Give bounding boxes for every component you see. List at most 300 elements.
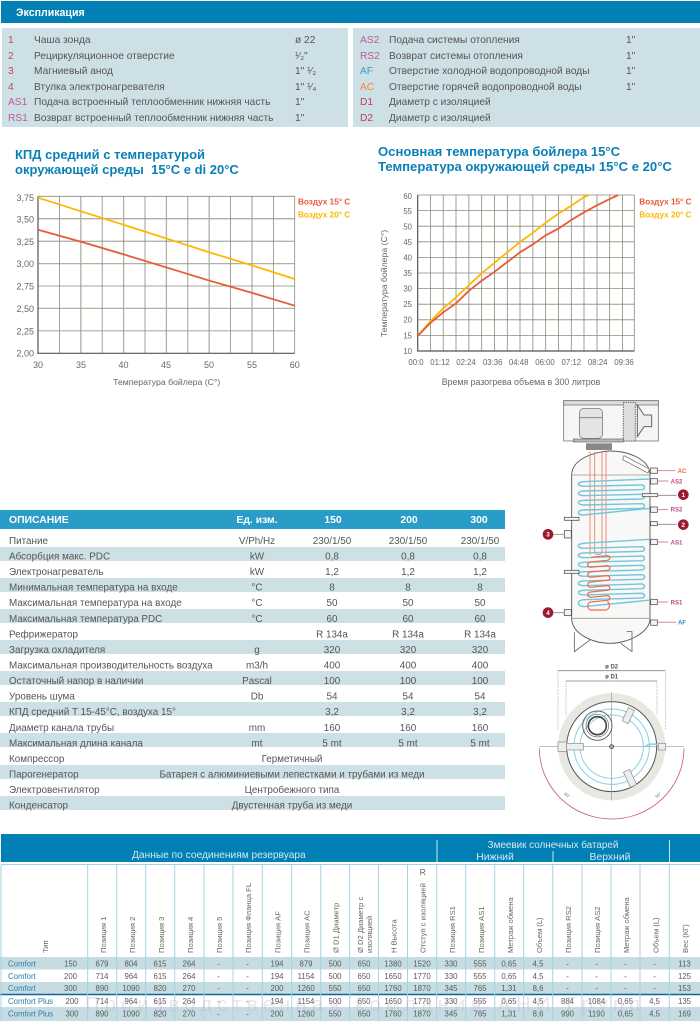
red coil — [588, 556, 610, 610]
line chart: efficiency: Температура бойлера (C°) — [113, 377, 220, 387]
row: Comfort Plus 300: 270 — [182, 1010, 196, 1018]
row: Comfort Plus 300: 200 — [270, 1010, 284, 1018]
row: Comfort Plus 200: 0,65 — [501, 997, 517, 1006]
line chart: heating time: 02:24 — [456, 358, 476, 367]
line chart: efficiency: 30 — [33, 360, 43, 370]
table: description: mm — [249, 723, 265, 734]
table: description: °C — [251, 582, 263, 594]
rotated column headers: Метраж обмена — [622, 896, 631, 953]
table: description: 8 — [329, 582, 335, 594]
row: Comfort 200: 1154 — [298, 972, 315, 981]
row: Comfort 150: 4,5 — [533, 960, 544, 968]
row bands — [0, 957, 700, 1021]
panel: explication left: 2 — [8, 51, 14, 62]
line chart: efficiency: 60 — [290, 360, 300, 370]
table: description: Db — [251, 692, 264, 702]
fittings — [564, 468, 658, 625]
rotated column headers: Позиция Фланца FL — [244, 883, 253, 953]
row: Comfort Plus 200: 1154 — [298, 997, 315, 1006]
row: Comfort Plus 200: - — [217, 997, 220, 1006]
rotated column headers: Позиция AC — [302, 910, 312, 953]
connection labels: AS2 — [671, 479, 683, 485]
row: Comfort 150: 330 — [444, 960, 458, 968]
line chart: heating time: 03:36 — [483, 358, 502, 367]
table: description: m3/h — [246, 660, 268, 672]
table: description: 60 — [475, 614, 486, 625]
line chart: efficiency: 3,50 — [16, 214, 34, 224]
table header band: Верхний — [590, 852, 631, 863]
heat pump unit — [564, 401, 658, 450]
row: Comfort Plus 300: 345 — [444, 1010, 458, 1018]
table header: Ед. изм. — [236, 515, 278, 526]
table: description: 0,8 — [473, 552, 487, 562]
table: description: Абсорбция макс. PDC — [9, 552, 110, 562]
panel: explication right: Отверстие горячей водопроводной воды — [389, 82, 582, 93]
table: description: 5 mt — [470, 738, 490, 750]
panel: explication left: 3 — [8, 66, 14, 77]
rotated column headers: Позиция AS2 — [593, 906, 602, 953]
row: Comfort Plus 200: 1770 — [413, 997, 431, 1006]
table: description: КПД средний T 15-45°C, воздуха 15° — [9, 707, 176, 718]
table: description: 54 — [403, 692, 414, 702]
diagram: tank cross-section — [543, 401, 689, 652]
row: Comfort 200: 125 — [678, 972, 692, 981]
line chart: heating time: 15 — [403, 332, 413, 340]
row: Comfort 300: 765 — [473, 984, 487, 993]
legend: efficiency chart: Воздух 20° C — [298, 210, 350, 220]
panel: explication right: AC — [360, 82, 374, 93]
panel: explication left: ¹⁄₂" — [295, 51, 308, 62]
row: Comfort 150: 113 — [678, 960, 691, 968]
legend: heating chart: Воздух 15° C — [639, 198, 692, 207]
line chart: heating time: 55 — [403, 207, 413, 216]
line chart: heating time: 07:12 — [562, 358, 581, 367]
anode — [623, 456, 649, 473]
row: Comfort Plus 200: 135 — [678, 997, 692, 1006]
panel: explication left: Подача встроенный теплообменник нижняя часть — [34, 96, 270, 108]
rotated column headers: Позиция RS2 — [564, 906, 573, 953]
panel: explication right: 1" — [626, 35, 636, 46]
line chart: efficiency: 3,25 — [16, 237, 34, 247]
table: description: 0,8 — [325, 552, 339, 562]
row: Comfort 200: 615 — [153, 972, 167, 981]
heading: heating chart: Основная температура бойлера 15°C — [378, 144, 621, 159]
panel: explication right: Отверстие холодной водопроводной воды — [389, 66, 590, 77]
table: description: 160 — [400, 723, 417, 734]
rotated column headers: Позиция 3 — [157, 917, 166, 953]
row: Comfort Plus 200: 200 — [65, 997, 79, 1006]
curve: air 15 — [38, 230, 295, 306]
line chart: heating time: 60 — [403, 192, 413, 201]
line chart: efficiency: 35 — [76, 360, 86, 370]
table: description — [0, 510, 505, 812]
line chart: efficiency: 2,75 — [16, 282, 34, 292]
table: description: 1,2 — [325, 567, 339, 578]
table: description: g — [254, 645, 260, 656]
row: Comfort Plus 200: 4,5 — [649, 997, 661, 1006]
panel: explication left: Чаша зонда — [34, 35, 91, 46]
rotated column headers: Позиция 4 — [186, 917, 195, 953]
table: description: 50 — [327, 598, 338, 609]
panel: explication right: D1 — [360, 97, 373, 108]
upper coil — [578, 479, 650, 515]
table: description: Pascal — [242, 676, 272, 687]
row: Comfort Plus 300: 765 — [473, 1010, 487, 1018]
numbered markers: 2 — [682, 522, 686, 529]
table header: 150 — [324, 515, 342, 526]
legs — [574, 632, 632, 652]
legend: heating chart: Воздух 20° C — [639, 210, 692, 220]
row: Comfort 150: 500 — [328, 960, 342, 968]
row: Comfort 300: 820 — [153, 984, 167, 993]
row: Comfort 300: 8,6 — [533, 984, 543, 993]
row: Comfort Plus 200: 330 — [444, 997, 458, 1006]
row: Comfort Plus 200: 964 — [124, 997, 138, 1006]
flange — [583, 711, 612, 740]
heading: heating chart: Температура окружающей среды 15°C e 20°C — [378, 159, 672, 174]
table: description: Максимальная температура PDC — [9, 614, 162, 625]
table: description: 160 — [324, 723, 341, 734]
connection labels: AS1 — [671, 541, 683, 547]
panel: explication right: AF — [360, 66, 373, 77]
row: Comfort 200: Comfort — [8, 972, 37, 981]
rotated column headers: Ø D1 Диаметр — [332, 903, 340, 953]
line chart: heating time: Время разогрева объема в 300 литров — [442, 377, 601, 387]
row: Comfort Plus 200: 555 — [473, 997, 487, 1006]
stubs — [558, 708, 666, 787]
row: Comfort 200: 264 — [182, 972, 196, 981]
row: Comfort 200: 555 — [473, 972, 487, 981]
line chart: heating time: 00:0 — [408, 358, 424, 367]
table: description: Конденсатор — [9, 800, 69, 812]
rotated column headers: Позиция 5 — [215, 917, 224, 953]
numbered markers: 3 — [546, 532, 550, 539]
row: Comfort 200: 0,65 — [501, 972, 517, 981]
table: description: 1,2 — [401, 567, 415, 578]
table header band: Данные по соединениям резервуара — [132, 850, 306, 861]
row: Comfort Plus 300 — [8, 1010, 691, 1018]
row: Comfort Plus 300: 0,65 — [618, 1010, 634, 1018]
row: Comfort Plus 300: 990 — [561, 1010, 575, 1018]
line chart: heating time: 30 — [403, 284, 413, 294]
row: Comfort 200: 330 — [444, 972, 458, 981]
row: Comfort Plus 200: 194 — [270, 997, 284, 1006]
table: description: Минимальная температура на входе — [9, 582, 178, 594]
panel: explication right: Диаметр с изоляцией — [389, 113, 491, 124]
line chart: heating time: 25 — [403, 300, 413, 309]
row: Comfort 300: - — [566, 984, 569, 993]
line chart: heating time: 09:36 — [614, 358, 634, 367]
table: description: 100 — [472, 676, 489, 687]
table: description: 230/1/50 — [389, 536, 428, 547]
table: description: 5 mt — [322, 738, 342, 750]
dimension lines — [558, 671, 665, 730]
row: Comfort 150: - — [217, 960, 220, 968]
row: Comfort Plus 300: 4,5 — [649, 1010, 661, 1018]
table: description: 3,2 — [401, 707, 415, 718]
line chart: heating time: 01:12 — [430, 358, 450, 367]
table: description: Компрессор — [9, 754, 65, 765]
row: Comfort 300: 1260 — [297, 984, 315, 993]
panel: explication left — [2, 28, 348, 127]
table: description: Максимальная производительность воздуха — [9, 660, 213, 672]
row: Comfort 200: 500 — [328, 972, 342, 981]
rotated column headers: R — [420, 867, 426, 877]
row: Comfort 300: 200 — [270, 984, 284, 993]
panel: explication left: RS1 — [8, 113, 28, 124]
row: Comfort 200: 200 — [64, 972, 78, 981]
table: description: Уровень шума — [9, 692, 75, 702]
table: description: Диаметр канала трубы — [9, 723, 114, 734]
table header band — [1, 834, 700, 863]
table: description: 1,2 — [473, 567, 487, 578]
panel: explication left: Рециркуляционное отверстие — [34, 51, 175, 62]
table header: 200 — [400, 515, 418, 526]
row: Comfort Plus 300: 1760 — [384, 1010, 402, 1018]
row: Comfort Plus 300: 820 — [153, 1010, 167, 1018]
table: description: 100 — [400, 676, 417, 687]
row: Comfort Plus 200: 1084 — [588, 997, 606, 1006]
row: Comfort 150: 804 — [124, 960, 138, 968]
row: Comfort 300: 345 — [444, 984, 458, 993]
table: description: Питание — [9, 536, 48, 547]
panel: explication right: D2 — [360, 113, 373, 124]
row: Comfort Plus 300: 8,6 — [533, 1010, 543, 1018]
row: Comfort Plus 200: 1650 — [384, 997, 402, 1006]
connection labels: RS1 — [671, 600, 683, 606]
row: Comfort 300: Comfort — [8, 984, 37, 993]
row: Comfort 150: - — [246, 960, 249, 968]
panel: explication left: ø 22 — [295, 35, 316, 46]
row: Comfort Plus 300: Comfort Plus — [8, 1010, 53, 1018]
line chart: efficiency: 40 — [118, 360, 129, 370]
line chart: efficiency — [16, 193, 300, 387]
row: Comfort 200: - — [246, 972, 249, 981]
table: description: Электровентилятор — [9, 785, 100, 796]
row: Comfort Plus 200: 714 — [95, 997, 109, 1006]
table: description: Максимальная температура на входе — [9, 598, 182, 609]
row: Comfort Plus 200: Comfort Plus — [8, 997, 53, 1006]
line chart: efficiency: 2,25 — [16, 326, 34, 336]
row: Comfort 300 — [8, 984, 691, 993]
table: description: Двустенная труба из меди — [232, 800, 352, 812]
table: description: 3,2 — [473, 707, 487, 718]
table: description: 3,2 — [325, 707, 339, 718]
rotated column headers — [41, 867, 690, 953]
line chart: heating time: 35 — [403, 269, 413, 278]
line chart: efficiency: 45 — [161, 360, 171, 370]
table: description: R 134a — [316, 630, 348, 640]
row: Comfort Plus 200: - — [246, 997, 249, 1006]
row: Comfort 150: 1520 — [413, 960, 431, 968]
numbered markers: 1 — [682, 492, 686, 499]
row: Comfort 300: 1870 — [413, 984, 431, 993]
row: Comfort Plus 200: 884 — [561, 997, 575, 1006]
explication header: Экспликация — [16, 7, 85, 19]
table: description: kW — [250, 552, 265, 562]
table: description: V/Ph/Hz — [239, 536, 275, 547]
row: Comfort 150: - — [566, 960, 569, 968]
numbered markers — [543, 489, 689, 618]
row: Comfort 300: - — [595, 984, 598, 993]
diagram: top view: 90° — [563, 791, 571, 799]
row: Comfort 150: - — [595, 960, 598, 968]
row: Comfort 200: 1650 — [384, 972, 402, 981]
line chart: heating time: 04:48 — [509, 358, 528, 367]
row: Comfort 150 — [8, 960, 691, 968]
row: Comfort 300: - — [653, 984, 656, 993]
diagram: top view: ø D1 — [605, 675, 619, 681]
row: Comfort Plus 300: 1870 — [413, 1010, 431, 1018]
row: Comfort Plus 200: 4,5 — [533, 997, 544, 1006]
watermark: Производственная компания АНИ Групп — [85, 994, 640, 1016]
panel: explication right: Возврат системы отопления — [389, 51, 523, 62]
row: Comfort Plus 200: 264 — [182, 997, 196, 1006]
row: Comfort 200: - — [217, 972, 220, 981]
table: description: 230/1/50 — [461, 536, 500, 547]
tank body — [572, 451, 650, 643]
line chart: efficiency: 3,00 — [16, 259, 34, 269]
connection labels: AF — [678, 621, 686, 627]
connection labels: AC — [678, 469, 687, 475]
explication header — [1, 1, 700, 23]
table: description: kW — [250, 567, 265, 578]
table: description: 8 — [405, 582, 411, 594]
row: Comfort 150: Comfort — [8, 960, 37, 968]
heading: heating chart — [378, 144, 672, 174]
panel: explication right: 1" — [626, 82, 636, 93]
table: description: 60 — [403, 614, 414, 625]
panel: explication left: AS1 — [8, 97, 28, 108]
rotated column headers: Тип — [41, 940, 50, 953]
rotated column headers: Объем (L) — [652, 917, 660, 953]
rotated column headers: Позиция AS1 — [477, 906, 486, 953]
row: Comfort Plus 300: 1090 — [122, 1010, 140, 1018]
line chart: heating time: 08:24 — [588, 358, 608, 367]
row: Comfort 200: - — [653, 972, 656, 981]
panel: explication left: 4 — [8, 82, 14, 93]
curve: air 20 — [38, 198, 295, 279]
row: Comfort 150: 555 — [473, 960, 487, 968]
panel: explication right — [353, 28, 700, 127]
row: Comfort 300: 1090 — [122, 984, 140, 993]
row: Comfort 200: 1770 — [413, 972, 431, 981]
legend: heating chart — [639, 198, 692, 220]
row: Comfort 150: - — [653, 960, 656, 968]
diagram: top view: 90° — [654, 791, 663, 799]
connection labels — [657, 469, 687, 627]
row: Comfort Plus 300: 1260 — [297, 1010, 315, 1018]
row: Comfort Plus 300: 300 — [65, 1010, 79, 1018]
rotated column headers: Метраж обмена — [506, 896, 515, 953]
line chart: efficiency: 55 — [247, 360, 257, 370]
panel: explication right: Подача системы отопления — [389, 35, 520, 46]
row: Comfort 200: - — [595, 972, 598, 981]
table: description: 54 — [475, 692, 486, 702]
connection labels: RS2 — [671, 507, 683, 513]
table: description: 230/1/50 — [313, 536, 352, 547]
table: description: Герметичный — [262, 754, 322, 765]
panel: explication left: 1" ¹⁄₂ — [295, 66, 316, 77]
rotated column headers: Ø D2 Диаметр с — [356, 897, 365, 953]
row: Comfort 300: 550 — [328, 984, 342, 993]
row: Comfort 300: 1,31 — [501, 984, 517, 993]
table: description: 54 — [327, 692, 338, 702]
rotated column headers: Отступ с изоляцией — [418, 883, 428, 953]
table: description: 400 — [472, 660, 489, 672]
table header: ОПИСАНИЕ — [9, 515, 69, 526]
panel: explication left: Магниевый анод — [34, 66, 113, 77]
row: Comfort 200: 964 — [124, 972, 138, 981]
line chart: heating time: 10 — [403, 347, 413, 356]
table: description: 400 — [324, 660, 341, 672]
row: Comfort 300: - — [246, 984, 249, 993]
rotated column headers: Позиция AF — [274, 911, 282, 953]
table: description: 50 — [403, 598, 414, 609]
row: Comfort Plus 200: 650 — [357, 997, 371, 1006]
rotated column headers: изоляцией — [365, 916, 374, 953]
table: description: R 134a — [392, 630, 424, 640]
table: description: Остаточный напор в наличии — [9, 676, 143, 687]
table: description: 0,8 — [401, 552, 415, 562]
rotated column headers: Позиция RS1 — [448, 906, 457, 953]
row: Comfort 300: 300 — [64, 984, 78, 993]
row: Comfort Plus 300: 550 — [328, 1010, 342, 1018]
panel: explication right: Диаметр с изоляцией — [389, 97, 491, 108]
line chart: heating time — [379, 192, 634, 387]
diagram: top view — [539, 665, 684, 819]
row: Comfort Plus 300: 1190 — [588, 1010, 606, 1018]
line chart: heating time: 06:00 — [535, 358, 555, 367]
table: description: R 134a — [464, 630, 496, 640]
row: Comfort Plus 200: 615 — [153, 997, 167, 1006]
row: Comfort 300: 650 — [357, 984, 371, 993]
row: Comfort 200: - — [566, 972, 569, 981]
table: description: 5 mt — [398, 738, 418, 750]
table: description: 100 — [324, 676, 341, 687]
table: description: 320 — [400, 645, 417, 656]
panel: explication left: 1" — [295, 113, 305, 124]
table: description: Центробежного типа — [245, 785, 340, 796]
line chart: efficiency: 3,75 — [16, 193, 34, 203]
row: Comfort 150: 615 — [153, 960, 167, 968]
row: Comfort 300: 890 — [95, 984, 109, 993]
panel: explication left: 1 — [8, 35, 14, 46]
row: Comfort Plus 300: - — [217, 1010, 220, 1018]
line chart: heating time: Температура бойлера (C°) — [379, 230, 389, 337]
heading: efficiency chart — [15, 147, 239, 177]
row: Comfort 300: - — [217, 984, 220, 993]
row: Comfort 150: 264 — [182, 960, 196, 968]
curve: air 20 — [418, 195, 589, 336]
panel: explication right: RS2 — [360, 51, 380, 62]
row: Comfort 300: 270 — [182, 984, 196, 993]
row: Comfort Plus 300: - — [246, 1010, 249, 1018]
table: description: °C — [251, 614, 263, 625]
table: description: Парогенератор — [9, 770, 79, 780]
panel: explication right: 1" — [626, 51, 636, 62]
row: Comfort Plus 200: 500 — [328, 997, 342, 1006]
row: Comfort Plus 300: 1,31 — [501, 1010, 517, 1018]
panel: explication left: 1" — [295, 97, 305, 108]
table: description: 160 — [472, 723, 489, 734]
table header band: Нижний — [476, 852, 514, 863]
row: Comfort 150: 679 — [95, 960, 109, 968]
table: description: Загрузка охладителя — [9, 645, 105, 656]
angle arc — [539, 748, 684, 819]
rotated column headers: H Высота — [390, 919, 398, 953]
panel: explication left: Втулка электронагревателя — [34, 82, 165, 93]
